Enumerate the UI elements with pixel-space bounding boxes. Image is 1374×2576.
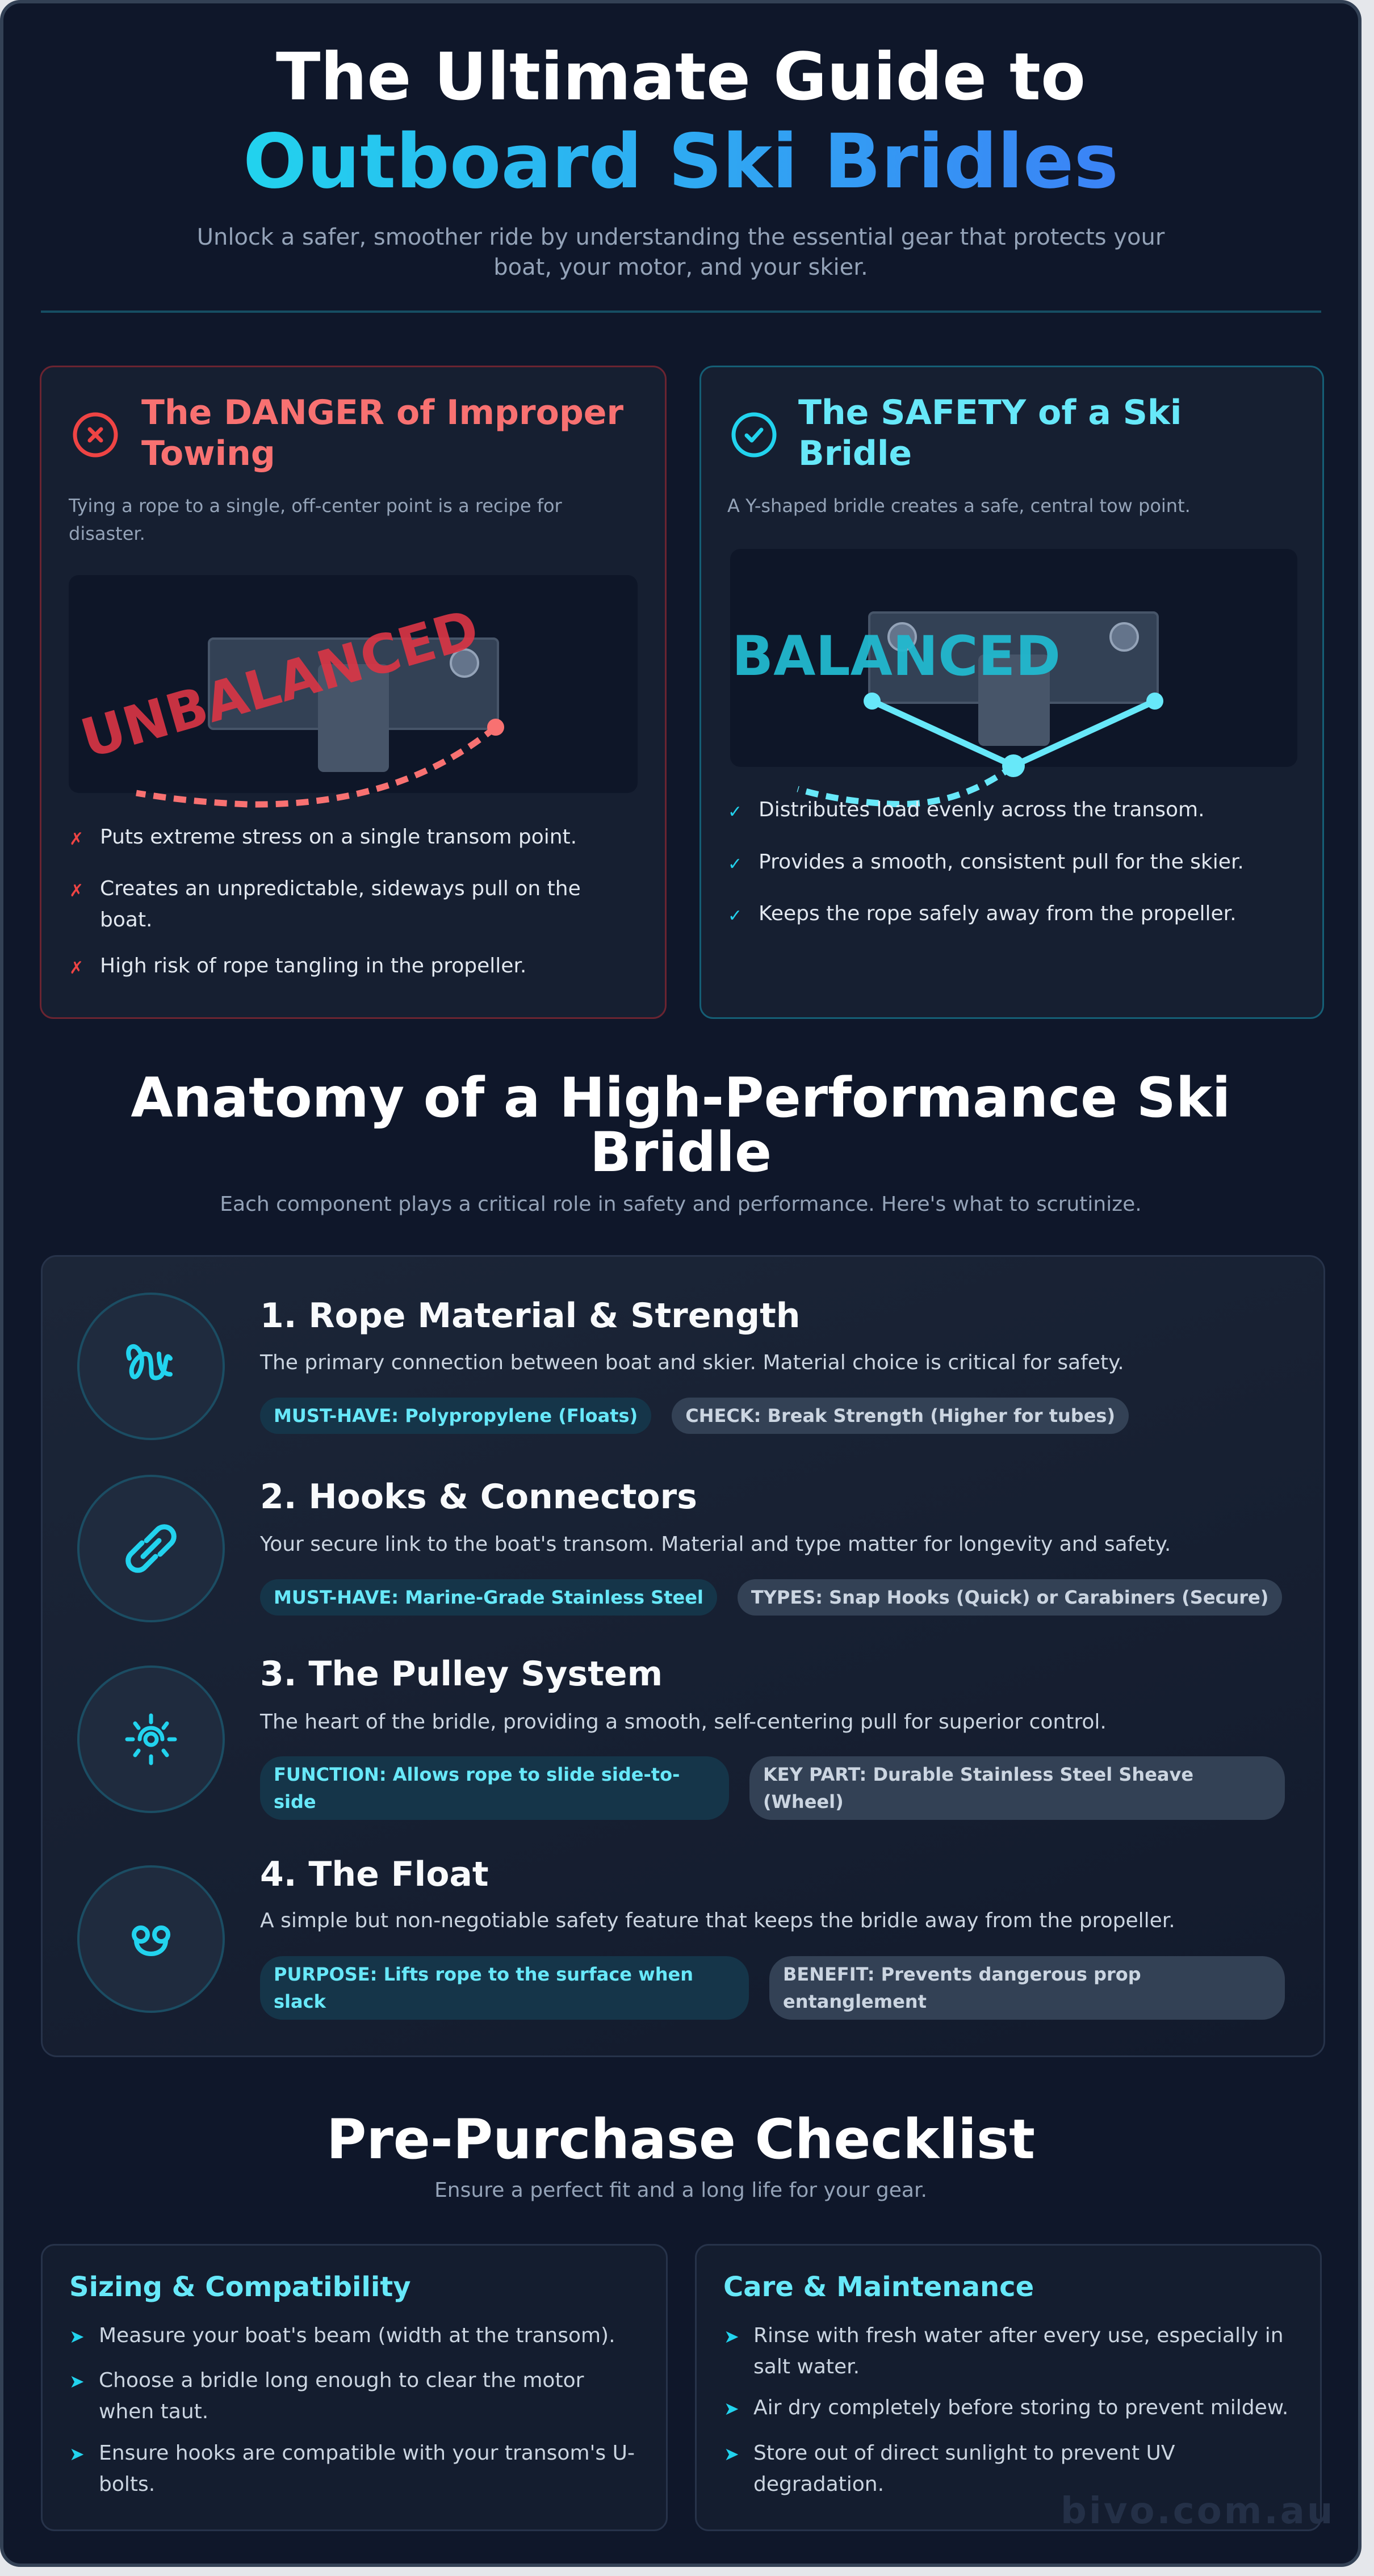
care items <box>724 2324 1284 2378</box>
anatomy heading: Anatomy of a High-Performance Ski <box>131 1066 1231 1130</box>
item 2 heading: 2. Hooks & Connectors <box>260 1477 697 1517</box>
safety heading: The SAFETY of a Ski <box>798 393 1182 433</box>
card: sizing: Choose a bridle long enough to clear the motor <box>99 2369 584 2392</box>
anatomy subtitle: Each component plays a critical role in safety and performance. Here's what to scrutinize. <box>220 1193 1142 1216</box>
anatomy heading: Bridle <box>590 1121 772 1184</box>
item 3 heading: 3. The Pulley System <box>260 1654 663 1694</box>
care items: salt water. <box>753 2355 860 2378</box>
title line 2: Outboard Ski Bridles <box>243 118 1119 205</box>
icon: check circle <box>731 412 777 458</box>
item 2 tags: MUST-HAVE: Marine-Grade Stainless Steel <box>274 1587 703 1608</box>
item 2 desc: Your secure link to the boat's transom. Material and type matter for longevity and safety. <box>260 1533 1171 1556</box>
card: sizing: bolts. <box>99 2473 155 2496</box>
care heading: Care & Maintenance <box>723 2271 1034 2303</box>
panel: danger: ✗ <box>69 881 83 901</box>
card: sizing: ➤ <box>69 2326 85 2347</box>
item 1 tags: MUST-HAVE: Polypropylene (Floats) <box>274 1405 638 1427</box>
anatomy heading <box>131 1066 1231 1184</box>
title line 1: The Ultimate Guide to <box>276 39 1086 115</box>
checklist heading: Pre-Purchase Checklist <box>326 2108 1035 2171</box>
item 3 tags <box>260 1756 1285 1820</box>
safety bullet 3: Keeps the rope safely away from the propeller. <box>759 902 1237 925</box>
card: care: degradation. <box>753 2473 884 2496</box>
panel: safety <box>699 366 1324 1019</box>
diagram: unbalanced: UNBALANCED <box>74 598 485 770</box>
safety bullet 2: Provides a smooth, consistent pull for the skier. <box>759 850 1244 874</box>
danger bullet 2: boat. <box>100 908 152 932</box>
safety desc: A Y-shaped bridle creates a safe, central tow point. <box>727 495 1191 517</box>
item 2 tags: TYPES: Snap Hooks (Quick) or Carabiners (Secure) <box>751 1587 1268 1608</box>
sizing heading: Sizing & Compatibility <box>69 2271 411 2303</box>
safety bullet 1: Distributes load evenly across the transom. <box>759 798 1205 821</box>
panel: safety: ✓ <box>728 854 742 874</box>
card: care <box>695 2244 1322 2531</box>
panel: danger <box>40 366 667 1019</box>
item 2 tags <box>260 1579 1282 1616</box>
subtitle <box>197 224 1165 280</box>
watermark: bivo.com.au <box>1061 2490 1335 2532</box>
safety heading: Bridle <box>798 434 912 473</box>
danger desc: disaster. <box>69 523 145 544</box>
card: sizing: when taut. <box>99 2400 208 2423</box>
danger bullet 3: High risk of rope tangling in the propeller. <box>100 954 526 977</box>
panel: anatomy <box>41 1255 1325 2057</box>
card: sizing <box>41 2244 668 2531</box>
card: care: ➤ <box>724 2443 739 2465</box>
danger bullet 1: Puts extreme stress on a single transom point. <box>100 825 577 849</box>
item 4 desc: A simple but non-negotiable safety feature that keeps the bridle away from the propeller. <box>260 1909 1175 1932</box>
danger heading <box>141 393 623 473</box>
icon: rope <box>77 1293 225 1440</box>
diagram: unbalanced <box>69 575 638 808</box>
item 4 tags: BENEFIT: Prevents dangerous prop entanglement <box>783 1964 1141 2012</box>
item 1 heading: 1. Rope Material & Strength <box>260 1296 801 1336</box>
panel: danger: ✗ <box>69 958 83 978</box>
panel: danger: ✗ <box>69 829 83 849</box>
item 1 tags <box>260 1398 1129 1434</box>
card: sizing: Ensure hooks are compatible with your transom's U- <box>99 2441 635 2465</box>
diagram: balanced: BALANCED <box>732 624 1061 688</box>
card: sizing: ➤ <box>69 2371 85 2392</box>
item 1 desc: The primary connection between boat and skier. Material choice is critical for safety. <box>260 1351 1124 1374</box>
danger heading: The DANGER of Improper <box>141 393 623 433</box>
card: care: Air dry completely before storing to prevent mildew. <box>753 2396 1288 2419</box>
item 4 heading: 4. The Float <box>260 1855 489 1894</box>
sizing items: Measure your boat's beam (width at the transom). <box>99 2324 615 2347</box>
item 3 tags: KEY PART: Durable Stainless Steel Sheave (Wheel) <box>763 1764 1193 1813</box>
icon: pulley <box>77 1665 225 1813</box>
item 4 tags: PURPOSE: Lifts rope to the surface when slack <box>274 1964 693 2012</box>
card: sizing: ➤ <box>69 2443 85 2465</box>
diagram: balanced <box>730 549 1297 807</box>
item 4 tags <box>260 1956 1285 2020</box>
item 1 tags: CHECK: Break Strength (Higher for tubes) <box>685 1405 1115 1427</box>
danger desc: Tying a rope to a single, off-center point is a recipe for <box>69 495 562 517</box>
care items: Rinse with fresh water after every use, especially in <box>753 2324 1284 2347</box>
card: care: ➤ <box>724 2398 739 2419</box>
item 3 desc: The heart of the bridle, providing a smooth, self-centering pull for superior control. <box>260 1710 1107 1734</box>
item 3 tags: FUNCTION: Allows rope to slide side-to-side <box>274 1764 680 1813</box>
panel: safety: ✓ <box>728 802 742 822</box>
safety heading <box>798 393 1182 473</box>
subtitle: Unlock a safer, smoother ride by understanding the essential gear that protects your <box>197 224 1164 250</box>
checklist subtitle: Ensure a perfect fit and a long life for your gear. <box>434 2179 927 2202</box>
danger bullet 2 <box>69 877 581 932</box>
icon: link <box>77 1475 225 1622</box>
icon: x circle <box>73 412 118 458</box>
danger bullet 2: Creates an unpredictable, sideways pull on the <box>100 877 581 900</box>
panel: safety: ✓ <box>728 906 742 926</box>
danger heading: Towing <box>141 434 275 473</box>
card: care: Store out of direct sunlight to prevent UV <box>753 2441 1175 2465</box>
card: care: ➤ <box>724 2326 739 2347</box>
danger desc <box>68 495 562 544</box>
icon: float <box>77 1865 225 2013</box>
subtitle: boat, your motor, and your skier. <box>493 254 868 280</box>
